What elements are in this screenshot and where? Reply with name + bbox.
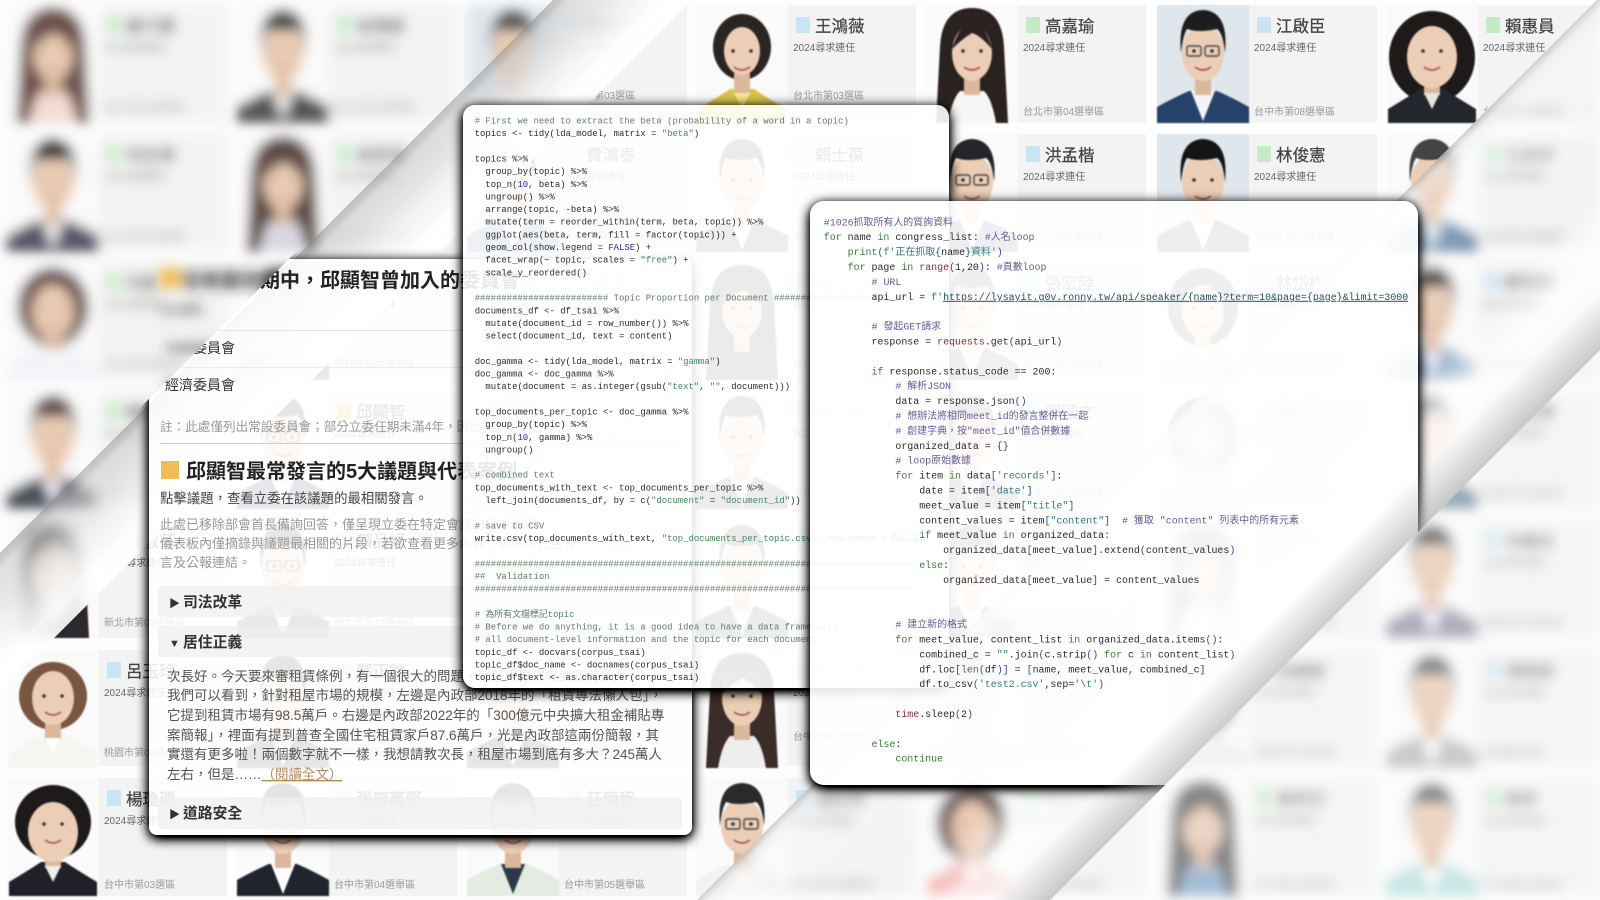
card: 張廖萬堅 [237, 778, 457, 896]
card: 邱顯智: 新竹市選舉區 [334, 487, 394, 500]
card: 賴惠員: 2024尋求連任 [1483, 41, 1545, 54]
blurred ghost of the committee panel text [152, 258, 285, 388]
card: row 6 col 5: 蔡其昌 [1045, 662, 1094, 681]
card: row 5 col 1: 2024尋求連任 [104, 556, 166, 569]
card: row 1 col 3: 2024尋求連任 [564, 41, 626, 54]
card: row 4 col 3 [467, 391, 687, 509]
card: row 7 col 5: 2024尋求連任 [1023, 814, 1085, 827]
card: row 6 col 7: 傅崐萁 [1505, 662, 1554, 681]
panel: R topic model code: ungroup() [475, 445, 533, 455]
card: row 3 col 2: 雲林縣第02選舉區 [334, 358, 415, 371]
panel: R topic model code: # Before we do anything, it is a good idea to have a data frame with [475, 622, 838, 632]
panel: Python scraping code: # 解析JSON [824, 379, 951, 392]
card: row 5 col 6: 2024尋求連任 [1254, 556, 1316, 569]
panel: R topic model code: group_by(topic) %>% [475, 420, 588, 430]
card: row 7 col 5 [926, 778, 1146, 896]
panel: R topic model code [463, 105, 949, 688]
card: 賴士葆: 賴士葆 [815, 146, 864, 165]
card: row 7 col 5: 陳素月 [1045, 790, 1094, 809]
card: 楊瓊瓔: 2024尋求連任 [104, 814, 166, 827]
panel: Python scraping code: if response.status_code == 200: [824, 366, 1056, 377]
card: row 3 col 7: 嘉義縣第02選舉區 [1483, 358, 1564, 371]
card: row 7 col 6 [1157, 778, 1377, 896]
card: 楊瓊瓔 [7, 778, 227, 896]
panel: Python scraping code: # 想辦法將相同meet_id的發言整併在一起 [824, 409, 1088, 422]
card: row 6 col 3: 台中市第02選舉區 [564, 746, 645, 759]
card: 羅廷瑋: 2024尋求連任 [793, 814, 855, 827]
panel: Python scraping code: if meet_value in organized_data: [824, 530, 1110, 541]
speech excerpt: 左右，但是……（閱讀全文） [167, 767, 342, 782]
card: row 5 col 3: 桃園市第01選舉區 [564, 616, 645, 629]
accordion: 道路安全: 道路安全 [183, 804, 242, 822]
speech excerpt: 實還有更多啦！兩個數字就不一樣，我想請教次長，租屋市場到底有多大？245萬人 [167, 746, 663, 762]
card: row 4 col 3: 林宜瑾 [586, 403, 636, 422]
card: row 4 col 1 [7, 391, 227, 509]
panel: Python scraping code: organized_data[meet_value].extend(content_values) [824, 545, 1235, 556]
panel: Python scraping code: df.loc[len(df)] = [name, meet_value, combined_c] [824, 664, 1206, 675]
card: row 4 col 1: 屏東縣第01選舉區 [104, 487, 185, 500]
card: row 3 col 3: 新北市第06選舉區 [564, 358, 645, 371]
card: row 7 col 6: 黃秀芳 [1276, 790, 1326, 809]
diagonal fold: gray inner edge over the panel [990, 290, 1600, 900]
panel: R topic model code: select(document_id, text = content) [475, 332, 672, 342]
heading: committees joined: 在本屆任期中，邱顯智曾加入的委員會 [180, 268, 520, 292]
card: row 5 col 2: 新北市第12選舉區 [334, 616, 415, 629]
card: row 4 col 6: 高雄市第06選舉區 [1254, 487, 1335, 500]
card: 江啟臣: 台中市第08選舉區 [1254, 105, 1335, 118]
explanatory notes: 言及公報連結。 [160, 555, 251, 570]
card: 呂玉玲 [7, 650, 227, 768]
card: row 1 col 2: 吳秉叡 [356, 17, 406, 36]
card: row 4 col 3: 台南市第06選舉區 [564, 487, 645, 500]
card: row 5 col 3: 2024尋求連任 [564, 556, 626, 569]
card: row 4 col 7: 李昆澤 [1505, 403, 1554, 422]
card: 邱顯智 [237, 391, 457, 509]
card: row 3 col 3: 2024尋求連任 [564, 298, 626, 311]
panel: Python scraping code: df.to_csv('test2.csv',sep='\t') [824, 679, 1104, 690]
card: row 5 col 6 [1157, 520, 1377, 638]
card: row 6 col 3 [467, 650, 687, 768]
card: 林岱樺: 2024尋求連任 [1254, 298, 1316, 311]
panel: R topic model code: ################################################################################## [475, 585, 914, 595]
panel: R topic model code: top_documents_with_text <- top_documents_per_topic %>% [475, 483, 764, 493]
panel: R topic model code: topics %>% [475, 154, 529, 164]
card: 費鴻泰 [467, 134, 687, 252]
instruction: 點擊議題，查看立委在該議題的最相關發言。 [160, 490, 428, 506]
panel: R topic model code: topic_df$doc_name <- docnames(corpus_tsai) [475, 660, 699, 670]
card: 洪孟楷: 2024尋求連任 [1023, 170, 1085, 183]
card: row 3 col 4: 蘇巧慧 [815, 274, 864, 293]
card: row 6 col 3: 2024尋求連任 [564, 686, 626, 699]
card: 洪孟楷: 新北市第01選舉區 [1023, 230, 1104, 243]
panel: R topic model code: topics <- tidy(lda_model, matrix = "beta") [475, 129, 699, 139]
card: row 3 col 2 [237, 262, 457, 380]
card: 莊競程 [467, 778, 687, 896]
panel: R topic model code: ######################### Topic Proportion per Document ######################### [475, 294, 908, 304]
speech excerpt: 我們可以看到，針對租屋市場的規模，左邊是內政部2018年的「租賃專法懶人包」， [167, 687, 663, 703]
card: row 5 col 4: 魯明哲 [815, 532, 864, 551]
accordion: 居住正義 [158, 626, 458, 657]
card: 楊瓊瓔: 楊瓊瓔 [126, 790, 176, 809]
card: 費鴻泰: 台北市第07選舉區 [564, 230, 645, 243]
panel: Python scraping code: # URL [824, 277, 901, 288]
accordion: 居住正義: 居住正義 [183, 633, 242, 651]
speech excerpt [167, 668, 664, 782]
panel: Python scraping code: combined_c = "".join(c.strip() for c in content_list) [824, 649, 1235, 660]
panel: R topic model code: facet_wrap(~ topic, scales = "free") + [475, 256, 689, 266]
card: 羅廷瑋: 羅廷瑋 [815, 790, 864, 809]
card: row 2 col 7: 王定宇 [1505, 146, 1554, 165]
card: row 2 col 2 [237, 134, 457, 252]
card: row 4 col 3: 2024尋求連任 [564, 427, 626, 440]
accordion: 司法改革 [158, 586, 458, 617]
card: 高嘉瑜: 高嘉瑜 [1045, 17, 1094, 36]
card: row 7 col 5: 彰化縣第04選舉區 [1023, 878, 1104, 891]
card: row 3 col 7: 蔡易餘 [1505, 274, 1554, 293]
panel: Python scraping code: for item in data['records']: [824, 471, 1062, 482]
panel: R topic model code: arrange(topic, -beta) %>% [475, 205, 620, 215]
card: 張宏陸: 張宏陸 [1045, 274, 1094, 293]
panel: R topic model code: ## Validation [475, 572, 550, 582]
panel: Python scraping code: response = requests.get(api_url) [824, 336, 1062, 348]
panel: Python scraping code: else: [824, 560, 949, 571]
card: 賴惠員 [1386, 5, 1600, 123]
panel: R topic model code: # save to CSV [475, 521, 545, 531]
panel: Python scraping code: #1026抓取所有人的質詢資料 [824, 215, 953, 228]
panel: Python scraping code: time.sleep(2) [824, 709, 973, 720]
panel: R topic model code: doc_gamma <- doc_gamma %>% [475, 370, 614, 380]
card: row 6 col 7: 2024尋求連任 [1483, 686, 1545, 699]
card: row 6 col 7 [1386, 650, 1600, 768]
panel: Python scraping code: organized_data[meet_value] = content_values [824, 575, 1200, 586]
card: row 4 col 4: 2024尋求連任 [793, 427, 855, 440]
card: row 5 col 4 [696, 520, 916, 638]
card: row 1 col 2: 2024尋求連任 [334, 41, 396, 54]
card: 林岱樺 [1157, 262, 1377, 380]
card: row 3 col 4 [696, 262, 916, 380]
card: 高嘉瑜: 台北市第04選舉區 [1023, 105, 1104, 118]
panel: R topic model code: top_n(10, gamma) %>% [475, 433, 593, 443]
card: row 6 col 6: 高雄市第01選舉區 [1254, 746, 1335, 759]
card: row 2 col 1 [7, 134, 227, 252]
card: row 3 col 3: 4會同 [586, 274, 628, 293]
explanatory notes [160, 517, 576, 570]
card: row 5 col 1: 林淑芬 [126, 532, 176, 551]
panel: R topic model code: doc_gamma <- tidy(lda_model, matrix = "gamma") [475, 357, 721, 367]
card: row 5 col 4: 2024尋求連任 [793, 556, 855, 569]
panel: R topic model code: # all document-level information and the topic for each document [475, 635, 817, 645]
card: row 5 col 3: 鄭運鵬 [586, 532, 636, 551]
panel: Python scraping code: # 發起GET請求 [824, 320, 941, 333]
panel: legislator committee and speech dashboard: 立法院 [160, 302, 202, 318]
panel: Python scraping code: # 建立新的格式 [824, 618, 967, 631]
card: row 2 col 7: 台南市第05選舉區 [1483, 230, 1564, 243]
card: 鄭正鈐: 2024尋求連任 [334, 686, 396, 699]
card: row 1 col 2: 新北市第04選舉區 [334, 101, 415, 114]
card: row 7 col 6: 2024尋求連任 [1254, 814, 1316, 827]
panel: Python scraping code: else: [824, 739, 901, 750]
card: row 7 col 7: 陳亭 [1505, 790, 1538, 809]
card: row 3 col 4: 新北市第05選舉區 [793, 358, 874, 371]
speech excerpt: 次長好。今天要來審租賃條例，有一個很大的問題，就是租屋市場到底有多大。 [167, 668, 640, 684]
card: 何欣純: 台中市第07選舉區 [793, 730, 874, 743]
card: 洪孟楷 [926, 134, 1146, 252]
card: row 1 col 1: 新北市第05選舉區 [104, 101, 185, 114]
card: row 2 col 7 [1386, 134, 1600, 252]
card: row 4 col 5: 郭國文 [1045, 403, 1094, 422]
card: row 3 col 2: 2024尋求連任 [334, 298, 396, 311]
card: 莊競程: 2024尋求連任 [564, 814, 626, 827]
card: 費鴻泰: 2024尋求連任 [564, 170, 626, 183]
card: row 2 col 1: 台北市第02選舉區 [104, 230, 185, 243]
panel: Python scraping code: api_url = f'https://lysayit.g0v.ronny.tw/api/speaker/{name}?term=10&page={page}&limit=3000 [824, 292, 1408, 303]
card: 賴士葆: 2024尋求連任 [793, 170, 855, 183]
panel: Python scraping code: meet_value = item["title"] [824, 500, 1074, 511]
card: 呂玉玲: 呂玉玲 [126, 662, 176, 681]
explanatory notes: 儀表板內僅摘錄與議題最相關的片段，若欲查看更多內容，請參考完整發 [160, 536, 576, 551]
card: row 1 col 3 [467, 5, 687, 123]
panel: R topic model code: mutate(document_id = row_number()) %>% [475, 319, 689, 329]
heading: top five issues: 邱顯智最常發言的5大議題與代表案例 [186, 460, 517, 483]
accordion: 道路安全: ▶ [169, 808, 180, 821]
card: 洪孟楷: 洪孟楷 [1045, 146, 1094, 165]
panel: Python scraping code: print(f'正在抓取{name}資料') [824, 245, 1003, 258]
card: 賴士葆 [696, 134, 916, 252]
panel: R topic model code: topic_df$text <- as.character(corpus_tsai) [475, 673, 699, 683]
card: 鄭正鈐: 鄭正鈐 [356, 662, 406, 681]
card: 高嘉瑜 [926, 5, 1146, 123]
card: row 4 col 5: 台南市第02選舉區 [1023, 487, 1104, 500]
card: row 3 col 7 [1386, 262, 1600, 380]
card: row 5 col 7: 2024尋求連任 [1483, 556, 1545, 569]
card: row 1 col 3: 羅明才 [586, 17, 636, 36]
panel: R topic model code: geom_col(show.legend = FALSE) + [475, 243, 651, 253]
speech excerpt: 它提到租賃市場有98.5萬戶。右邊是內政部2022年的「300億元中央擴大租金補貼專 [167, 707, 664, 723]
panel: Python scraping code: content_values = item["content"] # 獲取 "content" 列表中的所有元素 [824, 513, 1299, 526]
card: row 6 col 6: 邱議瑩 [1276, 662, 1326, 681]
card: 林岱樺: 高雄市第04選舉區 [1254, 358, 1335, 371]
card: 鄭正鈐 [237, 650, 457, 768]
card: row 3 col 3 [467, 262, 687, 380]
note: 註：此處僅列出常設委員會；部分立委任期未滿4年，因此委員會數量較少。 [160, 419, 583, 434]
accordion: 道路安全 [158, 797, 682, 829]
card: 莊競程: 台中市第05選舉區 [564, 878, 645, 891]
accordion: 司法改革: 司法改革 [183, 593, 242, 611]
committee item: 經濟委員會 [165, 377, 235, 393]
panel: Python scraping code: for name in congress_list: #人名loop [824, 230, 1035, 243]
card: 羅廷瑋 [696, 778, 916, 896]
card: 何欣純: 2024尋求連任 [793, 686, 855, 699]
card: row 5 col 2 [237, 520, 457, 638]
card: row 6 col 5: 2024尋求連任 [1023, 686, 1085, 699]
card: row 2 col 2: 台北市第01選舉區 [334, 230, 415, 243]
card: row 5 col 3 [467, 520, 687, 638]
card: 高嘉瑜: 2024尋求連任 [1023, 41, 1085, 54]
card: row 4 col 1: 2024尋求連任 [104, 427, 166, 440]
panel: R topic model code: top_documents_per_topic <- doc_gamma %>% [475, 408, 689, 418]
card: row 6 col 6 [1157, 650, 1377, 768]
panel: R topic model code: top_n(10, beta) %>% [475, 180, 588, 190]
card: 邱顯智: 邱顯智 [356, 403, 406, 422]
card: row 6 col 5 [926, 650, 1146, 768]
panel: R topic model code: write.csv(top_documents_with_text, "top_documents_per_topic.csv", row.names = FALSE) [475, 534, 924, 544]
card: row 5 col 1 [7, 520, 227, 638]
pale wash on the far-right blurred cards [1050, 350, 1600, 900]
card: 王鴻薇: 2024尋求連任 [793, 41, 855, 54]
card: row 5 col 2: 賴品妤 [356, 532, 406, 551]
card: row 5 col 6: 陳亭妃 [1276, 532, 1326, 551]
card: 林俊憲 [1157, 134, 1377, 252]
card: 林俊憲: 2024尋求連任 [1254, 170, 1316, 183]
card: row 4 col 5 [926, 391, 1146, 509]
panel: Python scraping code: data = response.json() [824, 396, 1027, 407]
card: 林俊憲: 林俊憲 [1276, 145, 1326, 165]
card: 江啟臣: 2024尋求連任 [1254, 41, 1316, 54]
card: row 4 col 4 [696, 391, 916, 509]
card: row 5 col 7: 涂權吉 [1505, 532, 1554, 551]
card: row 5 col 5 [926, 520, 1146, 638]
card: 呂玉玲: 桃園市第05選舉區 [104, 746, 185, 759]
accordion: 司法改革: ▶ [169, 597, 180, 610]
card: row 7 col 6: 彰化縣第03選舉區 [1254, 878, 1335, 891]
card: 張廖萬堅: 2024尋求連任 [334, 814, 396, 827]
card: 林岱樺: 林岱樺 [1276, 274, 1326, 293]
card: row 3 col 1: 台北市第06選舉區 [104, 358, 185, 371]
panel: Python scraping code: for meet_value, content_list in organized_data.items(): [824, 634, 1223, 646]
card: 費鴻泰: 費鴻泰 [586, 146, 636, 165]
panel: R topic model code: ungroup() %>% [475, 192, 556, 202]
card: 賴惠員: 賴惠員 [1505, 17, 1554, 36]
card: 王鴻薇 [696, 5, 916, 123]
card: row 2 col 1: 2024尋求連任 [104, 170, 166, 183]
card: row 5 col 5: 2024尋求連任 [1023, 556, 1085, 569]
card: row 3 col 4: 2024尋求連任 [793, 298, 855, 311]
card: 楊瓊瓔: 台中市第03選區 [104, 878, 175, 891]
card: row 2 col 1: 何志偉 [126, 146, 176, 165]
card: row 3 col 1 [7, 262, 227, 380]
card: row 5 col 2: 2024尋求連任 [334, 556, 396, 569]
card: row 5 col 1: 新北市第02選舉區 [104, 616, 185, 629]
card: 張廖萬堅: 台中市第04選舉區 [334, 878, 415, 891]
card: row 4 col 6: 劉世芳 [1276, 403, 1326, 422]
card: row 3 col 1: 范雲 [126, 274, 159, 293]
card: row 2 col 7: 2024尋求連任 [1483, 170, 1545, 183]
diagonal fold: left wipe edge [0, 0, 692, 692]
card: row 1 col 1 [7, 5, 227, 123]
card: row 5 col 7: 桃園市第03選舉區 [1483, 616, 1564, 629]
card: row 6 col 6: 2024尋求連任 [1254, 686, 1316, 699]
card: 江啟臣 [1157, 5, 1377, 123]
panel: R topic model code: scale_y_reordered() [475, 268, 587, 278]
speech excerpt: 案簡報」，裡面有提到普查全國住宅租賃家戶87.6萬戶，光是內政部這兩份簡報，其 [167, 727, 659, 743]
card: 羅廷瑋: 台中市第06選舉區 [793, 878, 874, 891]
card: 賴士葆: 台北市第08選舉區 [793, 230, 874, 243]
card: 張宏陸 [926, 262, 1146, 380]
panel: R topic model code: mutate(term = reorder_within(term, beta, topic)) %>% [475, 218, 764, 228]
card: row 1 col 3: 新北市第03選區 [564, 89, 635, 102]
card: 莊競程: 莊競程 [586, 790, 636, 809]
panel: Python scraping code: date = item['date'] [824, 486, 1033, 496]
card: 江啟臣: 江啟臣 [1276, 17, 1326, 36]
panel: legislator committee and speech dashboard [149, 259, 692, 835]
panel: Python scraping code: continue [824, 754, 943, 765]
card: 何欣純 [696, 650, 916, 768]
card: 王鴻薇: 台北市第03選區 [793, 89, 864, 102]
card: row 5 col 7 [1386, 520, 1600, 638]
card: 何欣純: 何欣純 [815, 662, 864, 681]
card: row 4 col 4: 高雄市第03選舉區 [793, 487, 874, 500]
card: 呂玉玲: 2024尋求連任 [104, 686, 166, 699]
card: row 4 col 6: 2024尋求連任 [1254, 427, 1316, 440]
panel: R topic model code: ggplot(aes(beta, term, fill = factor(topic))) + [475, 230, 737, 240]
card: row 4 col 1: 鍾佳濱 [126, 403, 176, 422]
card: row 7 col 7: 彰化縣第01選舉區 [1483, 878, 1564, 891]
committee item: 內政委員會 [165, 340, 235, 356]
card: row 4 col 4: 趙天麟 [815, 403, 865, 422]
panel: R topic model code: # 為所有文檔標記topic [475, 608, 574, 620]
card: row 3 col 7: 2024尋求連任 [1483, 298, 1545, 311]
card: 賴惠員: 台南市第03選舉區 [1483, 105, 1564, 118]
panel: R topic model code: left_join(documents_df, by = c("document" = "document_id")) [475, 496, 801, 506]
card: row 1 col 1: 蘇巧慧 [126, 17, 176, 36]
card: row 3 col 2: 蘇治芬 [356, 274, 406, 293]
card: 張宏陸: 2024尋求連任 [1023, 298, 1085, 311]
card: 鄭正鈐: 新竹市選舉區 [334, 746, 394, 759]
card: 張宏陸: 新北市第07選舉區 [1023, 358, 1104, 371]
card: row 6 col 5: 台中市第01選舉區 [1023, 746, 1104, 759]
card: 邱顯智: 2024尋求連任 [334, 427, 396, 440]
card: row 2 col 2: 吳思瑤 [356, 146, 406, 165]
panel: R topic model code: # combined text [475, 471, 555, 481]
panel: Python scraping code: for page in range(1,20): #頁數loop [824, 260, 1047, 273]
panel: R topic model code: documents_df <- df_tsai %>% [475, 306, 620, 316]
card: row 7 col 7: 2024尋求連任 [1483, 814, 1545, 827]
panel: Python scraping code [810, 201, 1418, 785]
card: row 5 col 4: 桃園市第02選舉區 [793, 616, 874, 629]
panel: Python scraping code: # loop原始數據 [824, 454, 971, 467]
card: 張廖萬堅: 張廖萬堅 [356, 790, 422, 809]
card: 王鴻薇: 王鴻薇 [815, 17, 864, 36]
card: row 4 col 7 [1386, 391, 1600, 509]
card: row 4 col 7: 2024尋求連任 [1483, 427, 1545, 440]
panel: R topic model code: mutate(document = as.integer(gsub("text", "", document))) [475, 382, 790, 392]
card: row 5 col 6: 台南市第01選舉區 [1254, 616, 1335, 629]
card: row 3 col 1: 2024尋求連任 [104, 298, 166, 311]
explanatory notes: 此處已移除部會首長備詢回答，僅呈現立委在特定會議的發言內容。 [160, 517, 550, 532]
diagonal fold: right wipe band [697, 0, 1600, 900]
panel: Python scraping code: # 創建字典，按"meet_id"值合併數據 [824, 424, 1070, 437]
card: row 5 col 5: 桃園市第01選舉區 [1023, 616, 1104, 629]
accordion: 居住正義: ▼ [169, 638, 180, 650]
panel: R topic model code: # First we need to extract the beta (probability of a word in a topic) [475, 116, 849, 126]
card: row 7 col 7 [1386, 778, 1600, 896]
panel: R topic model code: group_by(topic) %>% [475, 167, 588, 177]
card: row 4 col 7: 高雄市第05選舉區 [1483, 487, 1564, 500]
card: row 5 col 5: 牛煦庭 [1045, 532, 1094, 551]
card: row 4 col 6 [1157, 391, 1377, 509]
card: row 1 col 2 [237, 5, 457, 123]
panel: R topic model code: ################################################################################## [475, 559, 914, 569]
panel: R topic model code: topic_df <- docvars(corpus_tsai) [475, 648, 646, 658]
card: row 1 col 1: 2024尋求連任 [104, 41, 166, 54]
card: row 2 col 2: 2024尋求連任 [334, 170, 396, 183]
card: row 4 col 5: 2024尋求連任 [1023, 427, 1085, 440]
card: row 6 col 3: 顏寬恒 [586, 662, 636, 681]
panel: Python scraping code: organized_data = {} [824, 441, 1009, 452]
card: row 6 col 7: 花蓮縣選舉區 [1483, 746, 1543, 759]
card: 林俊憲: 台南市第04選舉區 [1254, 230, 1335, 243]
